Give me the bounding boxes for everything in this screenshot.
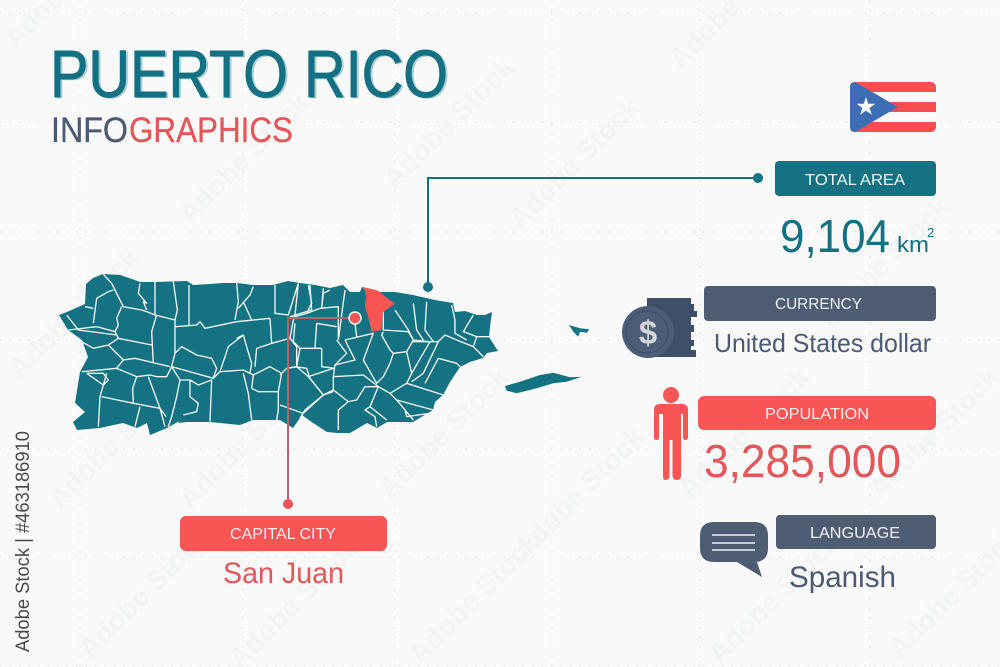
text: Adobe Stock — [372, 361, 516, 504]
text: Adobe Stock — [502, 91, 646, 234]
subtitle: GRAPHICS — [129, 111, 293, 150]
text: Adobe Stock — [172, 371, 316, 514]
text: Adobe Stock — [172, 86, 316, 229]
municipality borders east — [287, 283, 490, 430]
label: currency — [704, 286, 936, 321]
panel: total area: 2 — [927, 225, 934, 240]
text: Adobe Stock — [72, 521, 216, 664]
municipality borders west — [67, 274, 333, 427]
connector: total area — [423, 173, 763, 292]
subtitle: INFO — [51, 111, 128, 150]
value: currency: United States dollar — [714, 328, 931, 358]
stock credit: Adobe Stock | #463186910 — [13, 431, 34, 652]
icon: person — [654, 387, 688, 480]
value: population: 3,285,000 — [704, 435, 901, 487]
label: capital city — [180, 516, 387, 551]
subtitle — [51, 111, 293, 150]
panel: language: LANGUAGE — [810, 525, 900, 542]
map: Puerto Rico municipalities — [59, 274, 589, 435]
main island — [59, 274, 498, 435]
text: Adobe Stock — [672, 361, 816, 504]
panel: total area: km — [897, 232, 929, 257]
label: total area — [775, 161, 936, 196]
title: PUERTO RICO — [52, 38, 450, 113]
panel: population: POPULATION — [765, 406, 869, 423]
icon: coins: $ — [639, 314, 657, 351]
panel: currency — [704, 286, 936, 358]
panel: language — [776, 515, 936, 594]
panel: total area: TOTAL AREA — [805, 172, 905, 189]
label: language — [776, 515, 936, 549]
panel: currency: CURRENCY — [775, 296, 862, 313]
panel: total area — [775, 161, 936, 262]
icon: speech bubble — [700, 522, 768, 577]
value: capital city: San Juan — [223, 557, 344, 590]
San Juan region highlight — [362, 287, 395, 332]
value: total area: 9,104 — [780, 210, 890, 262]
panel: capital city — [180, 516, 387, 590]
panel: population — [698, 396, 936, 487]
label: population — [698, 396, 936, 430]
text: Adobe Stock — [507, 421, 651, 564]
connector: capital city — [283, 312, 361, 509]
icon: coins — [622, 298, 697, 358]
Vieques island — [505, 373, 582, 393]
text: Adobe Stock — [42, 371, 186, 514]
text: Adobe Stock — [2, 241, 146, 384]
value: language: Spanish — [789, 561, 896, 594]
Culebra island — [569, 325, 589, 337]
text: Adobe Stock — [402, 526, 546, 667]
text: Adobe Stock — [377, 51, 521, 194]
text: Adobe Stock — [812, 191, 956, 334]
title: PUERTO RICO — [50, 37, 448, 112]
icon: Puerto Rico flag — [850, 82, 936, 132]
text: Adobe Stock — [702, 526, 846, 667]
panel: capital city: CAPITAL CITY — [230, 526, 336, 543]
